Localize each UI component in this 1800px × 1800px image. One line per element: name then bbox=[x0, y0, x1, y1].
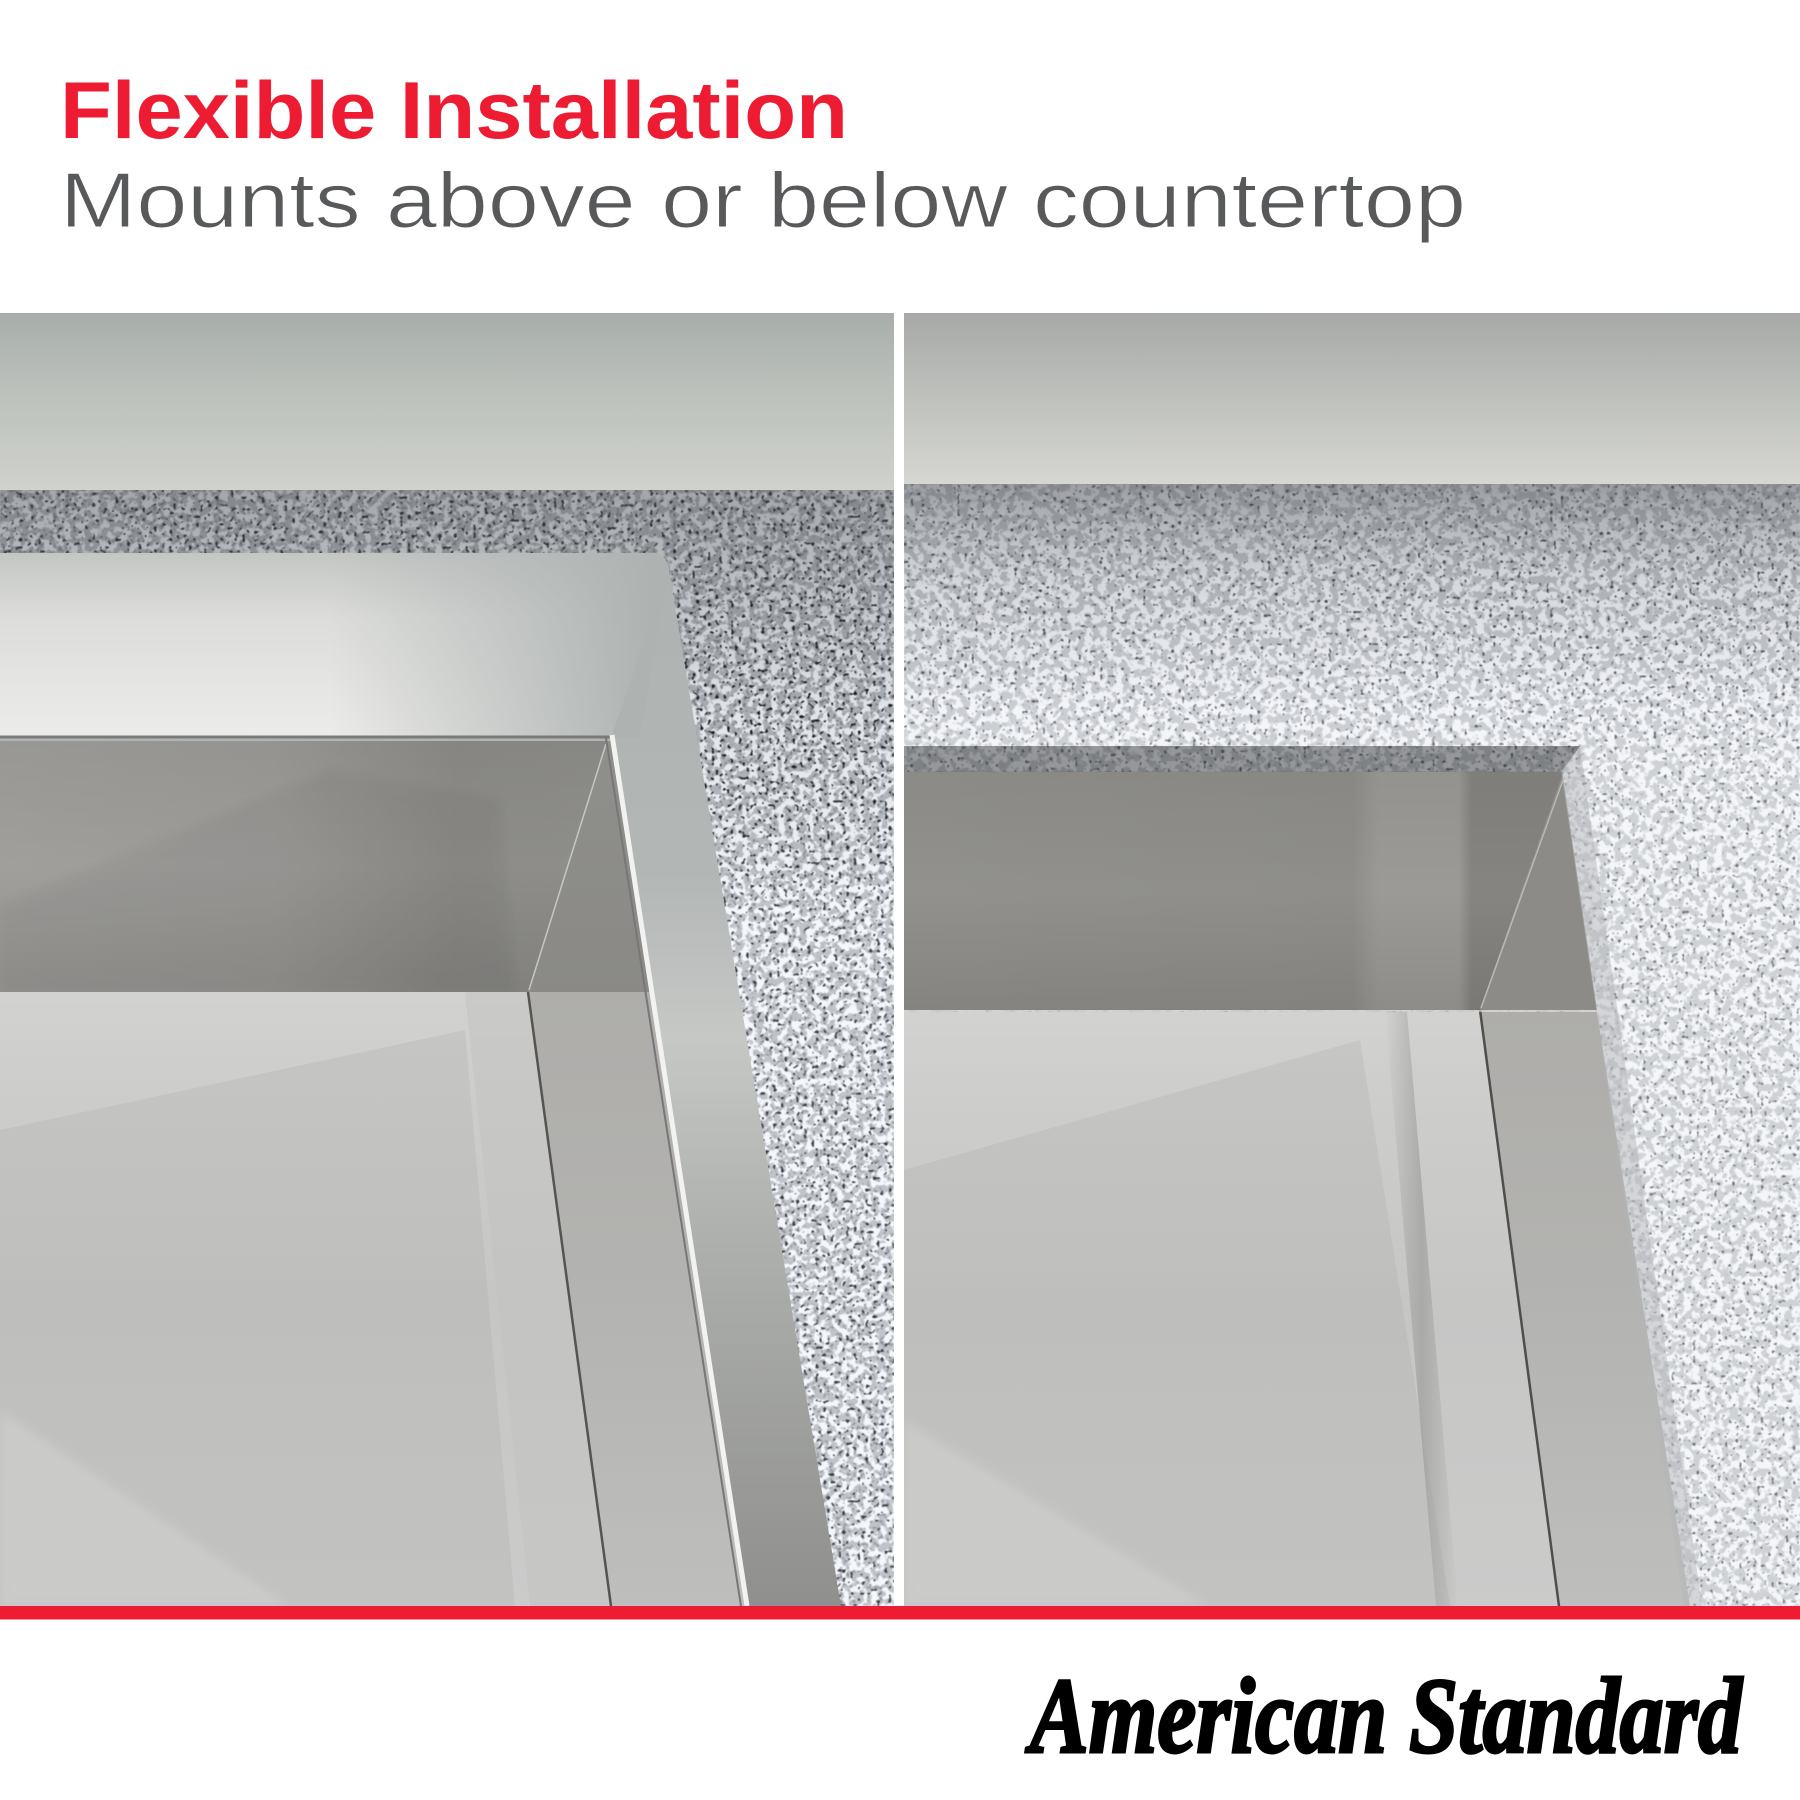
sink back wall bbox=[904, 771, 1564, 1010]
floor side section bbox=[1480, 1012, 1690, 1606]
panel: below-counter mount photo bbox=[904, 313, 1800, 1606]
subtitle: Mounts above or below countertop bbox=[60, 156, 1466, 244]
mitre seam bbox=[529, 744, 606, 990]
red divider bar bbox=[0, 1606, 1800, 1620]
panel: above-counter mount photo bbox=[0, 313, 894, 1606]
wall bbox=[0, 313, 894, 491]
countertop underside strip bbox=[904, 746, 1580, 772]
sink floor bbox=[0, 992, 611, 1606]
countertop cut edge bevel bbox=[1561, 746, 1702, 1606]
sink floor bbox=[904, 1012, 1559, 1606]
granite countertop bbox=[0, 490, 894, 1606]
title: Flexible Installation bbox=[60, 66, 848, 156]
mitre seam bbox=[1481, 780, 1563, 1008]
sink side wall bbox=[528, 741, 651, 992]
sink side wall bbox=[1480, 771, 1597, 1010]
sink back wall bbox=[0, 741, 607, 992]
floor seam bbox=[1480, 1010, 1559, 1606]
granite countertop bbox=[904, 484, 1800, 1606]
floor side section bbox=[528, 992, 746, 1606]
sink rim bbox=[0, 553, 841, 1606]
floor seam bbox=[528, 992, 611, 1606]
floor reflection streak bbox=[1393, 1012, 1448, 1606]
wall bbox=[904, 313, 1800, 485]
rim inner edge highlight bbox=[0, 735, 747, 1606]
